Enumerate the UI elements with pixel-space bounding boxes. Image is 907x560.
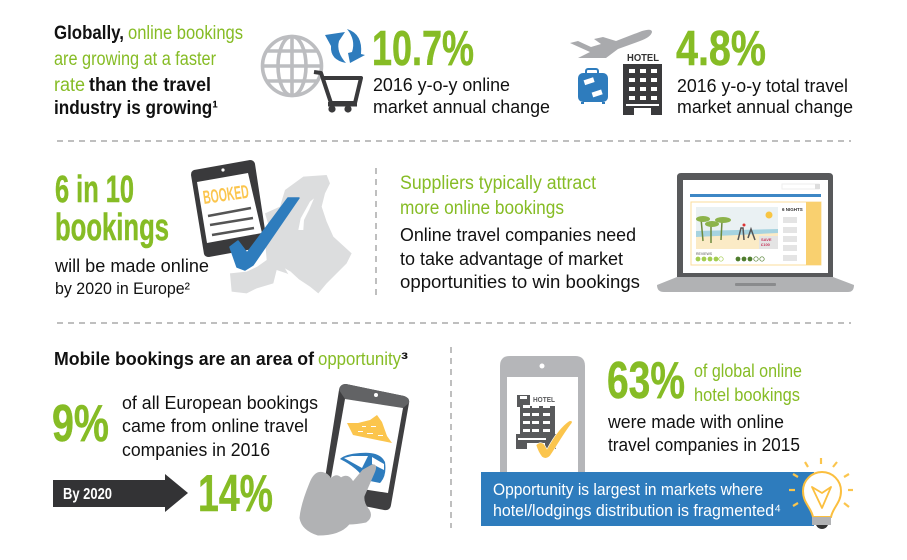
icon: tablet booked: [191, 160, 267, 257]
stat: 6 in 10 bookings: 6 in 10: [55, 169, 134, 211]
text: suppliers attract bookings: more online bookings: [400, 198, 564, 219]
icon: laptop with travel site: 6 NIGHTS: [782, 207, 803, 212]
icon: phone with hotel and check: [500, 356, 585, 473]
stat: 9% European bookings: companies in 2016: [122, 440, 270, 460]
stat: 10.7% online: 10.7%: [372, 22, 474, 76]
heading: global online bookings: rate: [54, 75, 85, 96]
text: suppliers attract bookings: [400, 173, 640, 292]
stat: 14%: 14%: [198, 465, 273, 523]
callout: opportunity box: [481, 472, 814, 526]
stat: 63% hotel bookings: were made with online: [607, 412, 784, 432]
icon: globe: [262, 36, 322, 96]
icon: laptop with travel site: REVIEWS: [696, 252, 713, 256]
heading: global online bookings: are growing at a faster: [54, 49, 217, 70]
stat: 4.8% total: market annual change: [677, 97, 853, 117]
icon: phone with hotel and check: HOTEL: [533, 397, 556, 404]
stat: 10.7% online: [372, 22, 550, 117]
stat: 4.8% total: [676, 22, 853, 117]
stat: 9% European bookings: came from online travel: [122, 416, 308, 436]
heading: mobile bookings: opportunity: [318, 349, 401, 369]
stat: 6 in 10 bookings: [54, 169, 209, 298]
text: suppliers attract bookings: to take advantage of market: [400, 249, 623, 269]
icon: shopping cart: [314, 72, 361, 113]
stat: 63% hotel bookings: of global online: [694, 361, 802, 381]
icon: suitcase: [578, 69, 608, 104]
icon: laptop with travel site: SAVE: [761, 237, 772, 242]
text: suppliers attract bookings: Online travel companies need: [400, 225, 636, 245]
stat: 9% European bookings: [52, 393, 318, 460]
icon: hotel building: HOTEL: [627, 52, 660, 64]
text: suppliers attract bookings: Suppliers typically attract: [400, 173, 597, 194]
stat: 10.7% online: 2016 y-o-y online: [373, 75, 510, 95]
stat: 63% hotel bookings: [607, 352, 802, 455]
icon: airplane: [570, 30, 652, 58]
heading: mobile bookings: Mobile bookings are an area of: [54, 349, 315, 369]
text: suppliers attract bookings: opportunities to win bookings: [400, 272, 640, 292]
heading: global online bookings: online bookings: [128, 23, 243, 44]
icon: laptop with travel site: [657, 173, 854, 292]
arrow: by 2020: [53, 474, 188, 512]
arrow: by 2020: By 2020: [63, 486, 112, 503]
icon: hotel building: [623, 52, 662, 115]
icon: refresh arrows: [325, 29, 365, 63]
icon: map of Europe: [230, 175, 352, 293]
icon: light bulb: [789, 458, 853, 529]
heading: global online bookings: industry is growing¹: [54, 98, 218, 119]
stat: 6 in 10 bookings: by 2020 in Europe²: [55, 279, 190, 298]
icon: phone with hand: [300, 384, 409, 535]
heading: global online bookings: [54, 23, 243, 119]
stat: 6 in 10 bookings: will be made online: [54, 256, 209, 276]
callout: opportunity box: hotel/lodgings distribution is fragmented⁴: [493, 501, 781, 520]
icon: blue check mark: [230, 198, 299, 270]
stat: 6 in 10 bookings: bookings: [55, 207, 169, 249]
heading: mobile bookings: ³: [401, 349, 408, 369]
heading: global online bookings: than the travel: [89, 75, 211, 96]
stat: 4.8% total: 2016 y-o-y total travel: [677, 76, 848, 96]
icon: tablet booked: BOOKED: [202, 182, 250, 209]
stat: 10.7% online: market annual change: [373, 97, 550, 117]
callout: opportunity box: Opportunity is largest in markets where: [493, 480, 763, 499]
stat: 63% hotel bookings: 63%: [607, 352, 685, 410]
stat: 9% European bookings: of all European bookings: [122, 393, 318, 413]
stat: 63% hotel bookings: hotel bookings: [694, 385, 800, 405]
icon: laptop with travel site: £100: [761, 242, 771, 247]
heading: global online bookings: Globally,: [54, 23, 124, 44]
stat: 9% European bookings: 9%: [52, 395, 109, 453]
stat: 63% hotel bookings: travel companies in 2015: [608, 435, 800, 455]
stat: 4.8% total: 4.8%: [676, 22, 766, 76]
